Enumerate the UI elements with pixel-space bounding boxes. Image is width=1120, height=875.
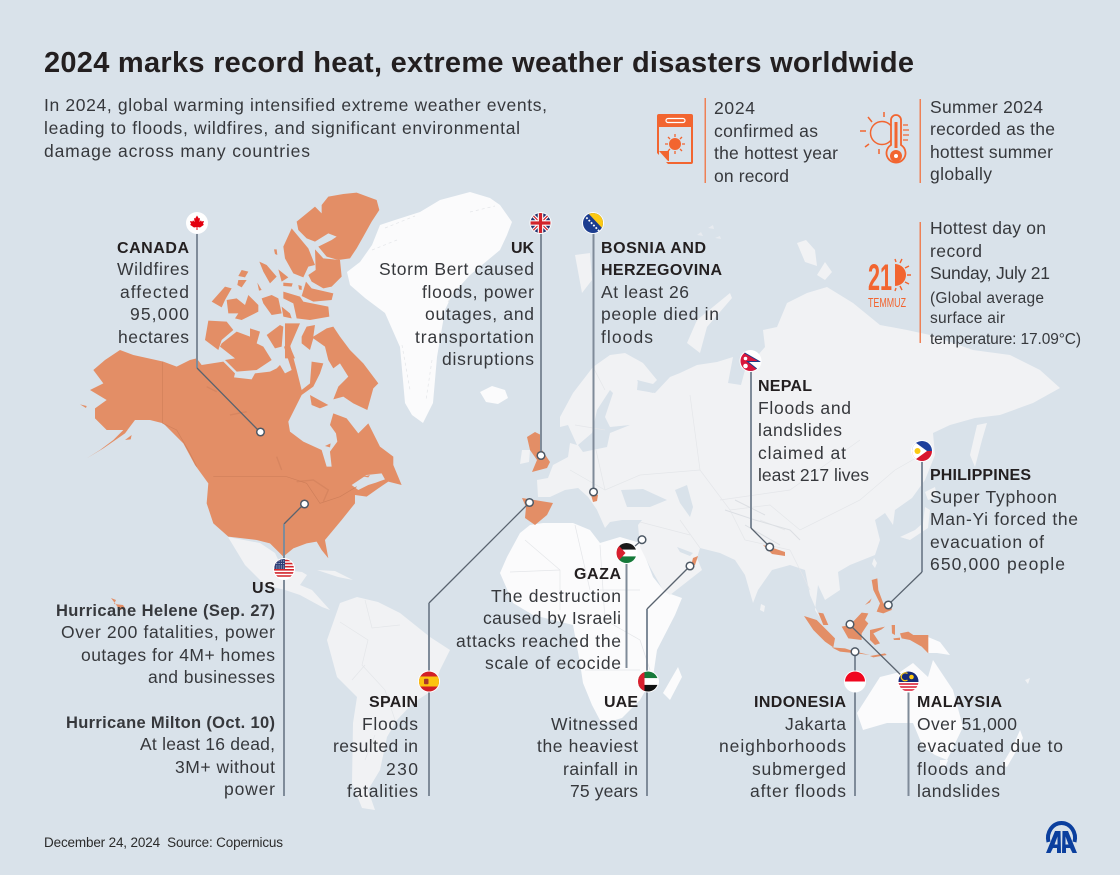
flag: Spain [418, 670, 440, 692]
text: Nepal: NEPAL [758, 378, 812, 395]
title: 2024 marks record heat, extreme weather disasters worldwide [44, 47, 914, 79]
highlighted: Indonesia, Malaysia and Philippines [804, 578, 928, 657]
callout: Canada [117, 212, 264, 436]
callout: Indonesia [719, 648, 866, 801]
leader line [627, 540, 642, 553]
text: UAE: 75 years [570, 781, 638, 801]
stat: hottest day: Hottest day on [930, 218, 1046, 238]
text: Philippines: evacuation of [930, 532, 1044, 552]
text: Philippines: PHILIPPINES [930, 467, 1031, 484]
text: Bosnia and Herzegovina: people died in [601, 304, 719, 324]
text: Malaysia: floods and [917, 759, 1006, 779]
text: UAE: the heaviest [537, 736, 638, 756]
text: Philippines: Super Typhoon [930, 487, 1057, 507]
flag: Nepal [740, 350, 762, 372]
flag: Bosnia and Herzegovina [582, 212, 604, 234]
stat: hottest day: record [930, 241, 982, 261]
text: Bosnia and Herzegovina: At least 26 [601, 282, 689, 302]
Bosnia and Herzegovina [590, 491, 598, 502]
text: Gaza: caused by Israeli [483, 608, 621, 628]
land: Australia and Oceania [857, 637, 1030, 768]
stat: hottest year: 2024 [714, 98, 755, 118]
text: Canada: CANADA [117, 240, 189, 257]
leader line [196, 233, 198, 368]
leader line [284, 504, 304, 524]
leader line [750, 371, 752, 528]
text: Gaza [456, 566, 621, 673]
text: US: 3M+ without [175, 757, 275, 777]
text: Malaysia: evacuated due to [917, 736, 1063, 756]
flag: Canada [186, 212, 208, 234]
text: Bosnia and Herzegovina: floods [601, 327, 653, 347]
leader line [850, 625, 908, 682]
stat: hottest summer: Summer 2024 [930, 97, 1043, 117]
text: UK: UK [511, 240, 534, 257]
text: Indonesia: neighborhoods [719, 736, 846, 756]
text: Canada: 95,000 [130, 304, 189, 324]
text: US [56, 580, 275, 799]
text: UK: Storm Bert caused [379, 259, 534, 279]
text: UK: outages, and [425, 304, 534, 324]
Nepal [763, 545, 785, 556]
text: UK: transportation [415, 327, 534, 347]
text: Spain: Floods [362, 714, 418, 734]
land: South America [327, 597, 450, 810]
text: Bosnia and Herzegovina: HERZEGOVINA [601, 262, 722, 279]
text: Indonesia: Jakarta [785, 714, 846, 734]
text: Canada: Wildfires [117, 259, 189, 279]
leader line [429, 503, 529, 603]
text: Malaysia: MALAYSIA [917, 694, 1002, 711]
callout: Spain [333, 499, 533, 801]
text: UAE: UAE [604, 694, 638, 711]
stat: hottest year: the hottest year [714, 143, 838, 163]
text: Gaza: scale of ecocide [485, 653, 621, 673]
callout: Bosnia and Herzegovina [582, 212, 722, 496]
text: Philippines: 650,000 people [930, 554, 1065, 574]
text: UK: floods, power [422, 282, 534, 302]
land: Eurasia [520, 225, 1060, 618]
intro text: damage across many countries [44, 141, 310, 161]
flag: Palestine [616, 543, 636, 564]
text: Gaza: attacks reached the [456, 631, 621, 651]
text: Nepal: Floods and [758, 398, 851, 418]
text: Philippines: Man-Yi forced the [930, 509, 1078, 529]
leader line [647, 566, 690, 609]
logo: AA [1046, 823, 1077, 853]
text: Nepal: claimed at [758, 443, 846, 463]
text: US: US [252, 580, 275, 597]
flag: US [273, 558, 295, 580]
text: Nepal [758, 378, 869, 485]
leader line [592, 233, 594, 488]
text: Nepal: landslides [758, 420, 842, 440]
text: US: power [224, 779, 275, 799]
land: Arctic Canada islands, highlighted [205, 193, 379, 372]
text: US: and businesses [148, 667, 275, 687]
stat: hottest day [868, 218, 1081, 348]
text: Bosnia and Herzegovina [601, 240, 722, 347]
callout: UAE [537, 562, 694, 801]
text: Canada: hectares [118, 327, 189, 347]
callout: UK [379, 212, 552, 459]
text: US: Hurricane Helene (Sep. 27) [56, 602, 275, 620]
stat: hottest year: on record [714, 166, 789, 186]
world map [80, 192, 1060, 810]
callout: Malaysia [846, 620, 1063, 801]
intro text [44, 95, 547, 161]
UK [527, 432, 550, 472]
land: Greenland [347, 192, 512, 423]
flag: Malaysia [898, 672, 918, 692]
land: Africa [500, 523, 682, 724]
text: Canada: affected [120, 282, 189, 302]
text: UK [379, 240, 534, 369]
stat: hottest day: (Global average [930, 290, 1044, 307]
text: Spain: SPAIN [369, 694, 418, 711]
land: Mexico and Central America [111, 537, 353, 610]
leader line [854, 655, 856, 796]
text: Malaysia [917, 694, 1063, 801]
text: Bosnia and Herzegovina: BOSNIA AND [601, 240, 706, 257]
highlighted countries in Europe and the Middle East [522, 432, 785, 566]
text: Gaza: The destruction [491, 586, 621, 606]
flag: UAE [637, 670, 659, 692]
text: Nepal: least 217 lives [758, 465, 869, 485]
text: Indonesia: after floods [750, 781, 846, 801]
text: UK: disruptions [442, 349, 534, 369]
flag: UK [530, 212, 552, 234]
text: UAE [537, 694, 638, 801]
text: Malaysia: Over 51,000 [917, 714, 1017, 734]
icon: sun and thermometer [860, 112, 909, 163]
callout: Philippines [884, 440, 1078, 609]
text: Spain: 230 [386, 759, 418, 779]
stat: hottest summer [860, 97, 1055, 184]
text: Spain: fatalities [347, 781, 418, 801]
text: Indonesia [719, 694, 846, 801]
text: US: At least 16 dead, [140, 734, 275, 754]
text: UAE: Witnessed [551, 714, 638, 734]
UAE [691, 556, 698, 566]
stat: hottest summer: recorded as the [930, 119, 1055, 139]
Spain [522, 498, 553, 525]
stat: hottest summer: hottest summer [930, 142, 1053, 162]
icon: 21 Temmuz sun: 21 [868, 257, 892, 298]
text: US: Over 200 fatalities, power [61, 622, 275, 642]
text: UAE: rainfall in [563, 759, 638, 779]
flag: Philippines [911, 440, 933, 462]
text: US: outages for 4M+ homes [81, 645, 275, 665]
icon: 21 Temmuz sun: TEMMUZ [868, 296, 906, 310]
callout: Gaza [456, 536, 646, 673]
land: Canada and United States, highlighted [80, 325, 402, 558]
text: Canada [117, 240, 189, 347]
stat: hottest year: confirmed as [714, 121, 818, 141]
footer source: December 24, 2024 Source: Copernicus [44, 835, 283, 850]
stat: hottest day: Sunday, July 21 [930, 263, 1050, 283]
intro text: leading to floods, wildfires, and significant environmental [44, 118, 520, 138]
text: Spain [333, 694, 418, 801]
text: Indonesia: submerged [752, 759, 846, 779]
leader line [921, 461, 923, 572]
text: Malaysia: landslides [917, 781, 1000, 801]
callout: Nepal [740, 350, 869, 551]
stat: hottest day: temperature: 17.09°C) [930, 331, 1081, 348]
intro text: In 2024, global warming intensified extreme weather events, [44, 95, 547, 115]
text: Gaza: GAZA [574, 566, 621, 583]
icon: calendar with sun [657, 114, 693, 164]
text: Spain: resulted in [333, 736, 418, 756]
callout: US [56, 500, 308, 799]
stat: hottest year [657, 98, 838, 186]
text: US: Hurricane Milton (Oct. 10) [66, 714, 275, 732]
leader line [540, 233, 542, 452]
stat: hottest day: surface air [930, 310, 1005, 327]
stat: hottest summer: globally [930, 164, 992, 184]
flag: Indonesia [844, 670, 866, 692]
text: Indonesia: INDONESIA [754, 694, 846, 711]
text: Philippines [930, 467, 1078, 574]
